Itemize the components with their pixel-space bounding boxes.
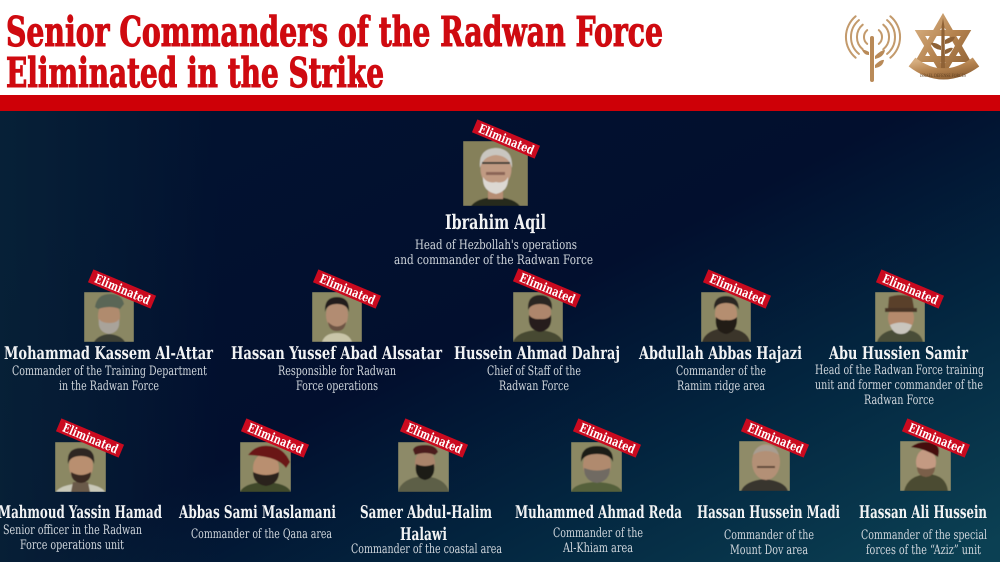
photo: Ibrahim Aqil	[463, 141, 528, 206]
role: Commander of the coastal area	[351, 542, 502, 557]
badge: Eliminated: Eliminated	[745, 420, 806, 457]
role	[394, 238, 593, 268]
profile: Abdullah Abbas Hajazi	[638, 269, 802, 394]
badge: Eliminated: Eliminated	[92, 271, 153, 308]
profile: Samer Abdul-Halim Halawi	[351, 418, 502, 557]
role: Commander of the Qana area	[191, 527, 332, 542]
badge: Eliminated: Eliminated	[517, 270, 578, 307]
role	[278, 364, 396, 394]
profile: Ibrahim Aqil	[394, 119, 593, 268]
name: Mohammad Kassem Al-Attar	[4, 344, 214, 364]
photo: Mohammad Kassem Al-Attar	[84, 292, 134, 342]
name: Abdullah Abbas Hajazi	[638, 344, 802, 364]
role	[12, 364, 208, 394]
photo: Hassan Ali Hussein	[900, 441, 951, 491]
name: Halawi	[400, 525, 447, 545]
role: Commander of the	[724, 528, 814, 543]
profile: Mahmoud Yassin Hamad	[0, 418, 162, 553]
role: Head of Hezbollah's operations	[415, 238, 577, 253]
title	[6, 8, 663, 97]
badge: Eliminated	[241, 418, 309, 458]
photo: Abu Hussien Samir	[875, 292, 925, 342]
name: Hassan Yussef Abad Alssatar	[231, 344, 443, 364]
role	[815, 363, 984, 408]
photo: Abdullah Abbas Hajazi	[701, 292, 751, 342]
badge: Eliminated: Eliminated	[880, 271, 941, 308]
badge: Eliminated: Eliminated	[906, 420, 967, 457]
photo: Abbas Sami Maslamani	[240, 442, 291, 492]
name: Samer Abdul-Halim	[360, 503, 492, 523]
badge: Eliminated	[876, 269, 944, 309]
name: Hussein Ahmad Dahraj	[454, 344, 620, 364]
badge: Eliminated	[88, 269, 156, 309]
photo: Hassan Yussef Abad Alssatar	[312, 292, 362, 342]
badge: Eliminated	[741, 418, 809, 458]
photo: Samer Abdul-Halim Halawi	[398, 442, 449, 492]
role: and commander of the Radwan Force	[394, 253, 593, 268]
role	[553, 526, 643, 556]
role	[724, 528, 814, 558]
header background	[0, 0, 1000, 95]
role: Ramim ridge area	[677, 379, 765, 394]
role: Al-Khiam area	[562, 541, 633, 556]
role	[861, 528, 987, 558]
badge: Eliminated: Eliminated	[707, 271, 768, 308]
photo: Hassan Hussein Madi	[739, 441, 790, 491]
role: Senior officer in the Radwan	[3, 523, 142, 538]
badge: Eliminated	[513, 268, 581, 308]
photo: Muhammed Ahmad Reda	[571, 442, 622, 492]
name: Mahmoud Yassin Hamad	[0, 503, 162, 523]
badge: Eliminated: Eliminated	[317, 271, 378, 308]
role: Force operations	[296, 379, 378, 394]
badge: Eliminated	[902, 418, 970, 458]
badge: Eliminated	[573, 418, 641, 458]
badge: Eliminated: Eliminated	[577, 420, 638, 457]
badge: Eliminated: Eliminated	[476, 121, 537, 158]
badge: Eliminated: Eliminated	[245, 420, 306, 457]
role	[487, 364, 581, 394]
profile: Hassan Ali Hussein	[859, 418, 987, 558]
name: Ibrahim Aqil	[445, 210, 546, 234]
profile: Abbas Sami Maslamani	[178, 418, 336, 542]
red band	[0, 95, 1000, 111]
profile: Mohammad Kassem Al-Attar	[4, 269, 214, 394]
role: Responsible for Radwan	[278, 364, 396, 379]
profile: Hassan Hussein Madi	[697, 418, 840, 558]
profile: Hussein Ahmad Dahraj	[454, 268, 620, 394]
role: Force operations unit	[20, 538, 125, 553]
badge: Eliminated: Eliminated	[60, 420, 121, 457]
icon: antenna emblem	[846, 16, 900, 80]
role: in the Radwan Force	[59, 379, 159, 394]
icon: IDF star emblem	[912, 18, 976, 79]
photo: Hussein Ahmad Dahraj	[513, 292, 563, 342]
role	[676, 364, 766, 394]
role	[3, 523, 142, 553]
badge: Eliminated	[703, 269, 771, 309]
profile: Muhammed Ahmad Reda	[515, 418, 682, 556]
title: Eliminated in the Strike	[6, 49, 384, 97]
name	[360, 503, 492, 545]
role: Commander of the Training Department	[12, 364, 208, 379]
role: Mount Dov area	[730, 543, 808, 558]
badge: Eliminated	[472, 119, 540, 159]
icon: IDF star emblem: ISRAEL DEFENSE FORCES	[920, 73, 966, 79]
role: Chief of Staff of the	[487, 364, 581, 379]
photo: Mahmoud Yassin Hamad	[55, 442, 106, 492]
profile: Hassan Yussef Abad Alssatar	[231, 269, 443, 394]
name: Abbas Sami Maslamani	[178, 503, 336, 523]
role: Radwan Force	[864, 393, 934, 408]
role: Radwan Force	[499, 379, 569, 394]
profile: Abu Hussien Samir	[815, 269, 984, 408]
badge: Eliminated: Eliminated	[404, 420, 465, 457]
badge: Eliminated	[313, 269, 381, 309]
role: Commander of the	[553, 526, 643, 541]
name: Muhammed Ahmad Reda	[515, 503, 682, 523]
badge: Eliminated	[56, 418, 124, 458]
title: Senior Commanders of the Radwan Force	[6, 8, 663, 56]
name: Hassan Hussein Madi	[697, 503, 840, 523]
role: Commander of the	[676, 364, 766, 379]
badge: Eliminated	[400, 418, 468, 458]
